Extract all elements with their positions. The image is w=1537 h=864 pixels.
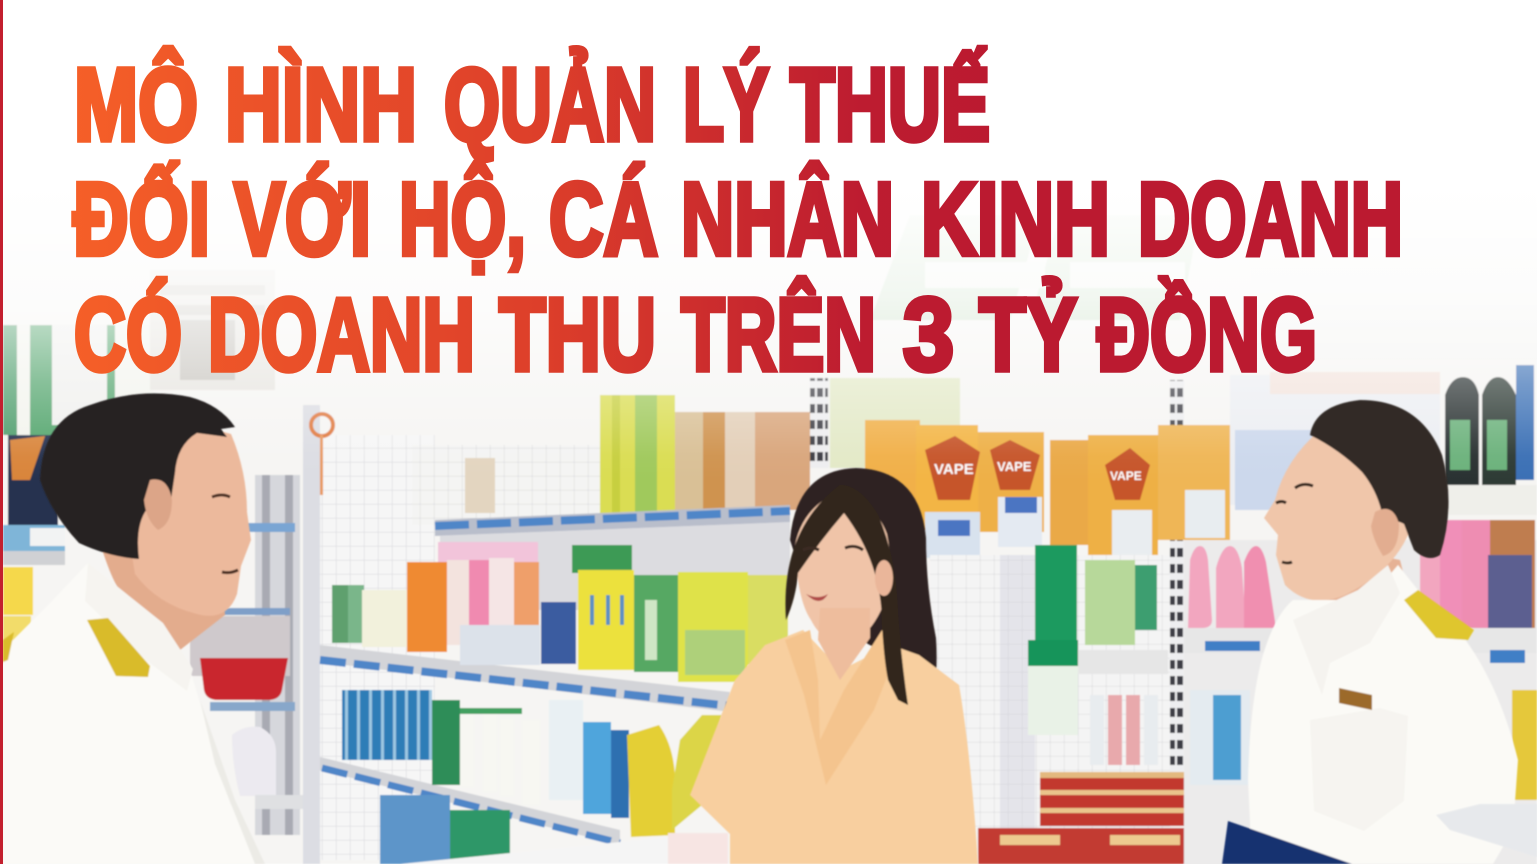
title line 3: THU [499,277,656,392]
title line 2: DOANH [1138,161,1403,276]
title line 2 [73,161,1403,276]
name badge [1339,688,1372,710]
left red edge [0,0,3,864]
title line 1: HÌNH [225,47,417,162]
hair [1310,400,1449,558]
eye and mouth [212,495,238,573]
person: woman in peach shirt [690,468,978,864]
eyes and mouth [803,546,863,550]
shirt [3,563,265,864]
hanging insect-repellent packs: VAPE [997,459,1032,474]
title line 1: MÔ [74,46,198,162]
title line 3: TRÊN [681,276,876,392]
blue folder [1222,821,1352,864]
white tray at corner [1436,804,1537,857]
hanging insect-repellent packs [865,420,1230,558]
title line 3: TỶ [979,276,1077,392]
pegboard uprights and mesh [810,378,1184,835]
title line 3: 3 [903,277,954,392]
title line 2: CÁ [549,161,658,276]
neck and face [90,510,225,650]
side hair [785,485,908,705]
person: tax officer on left [3,393,265,864]
title line 3 [74,276,1317,392]
epaulette [1404,590,1474,640]
title line 2: KINH [921,161,1110,276]
face [795,490,890,644]
middle shelf products [332,542,788,682]
title line 3: DOANH [208,277,475,392]
title line 2: VỚI [234,161,371,276]
title line 1: THUẾ [790,47,990,162]
shirt [1248,565,1518,864]
epaulette [87,618,150,677]
centre gondola frame and wire mesh [303,405,602,864]
hair [40,393,235,559]
title [73,46,1403,392]
person: tax officer on right [1222,400,1537,864]
left wall shelf with products [3,270,275,664]
rear metal shelf unit [190,475,305,835]
title line 2: HỘ, [399,161,526,276]
title line 3: ĐỒNG [1097,277,1317,392]
eyes and mouth [1276,484,1313,563]
title line 1: LÝ [683,47,769,162]
hanging insect-repellent packs: VAPE [934,461,974,478]
shirt [690,630,978,864]
title line 2: NHÂN [681,161,894,276]
lower shelf bottles [342,690,730,864]
hair back [790,468,937,693]
title line 1 [74,46,990,162]
top shelf: yellow and brown pouches [600,378,960,515]
shelf rails [320,505,790,845]
title line 3: CÓ [74,277,182,392]
title line 2: ĐỐI [73,161,210,276]
face and neck [1310,550,1410,650]
title line 1: QUẢN [444,47,656,162]
red boxed goods [978,772,1223,864]
white fade over top of photo [0,0,1537,480]
hanging insect-repellent packs: VAPE [1110,469,1142,483]
faint signs behind title [870,215,1537,360]
right wall shelves [1184,365,1537,864]
